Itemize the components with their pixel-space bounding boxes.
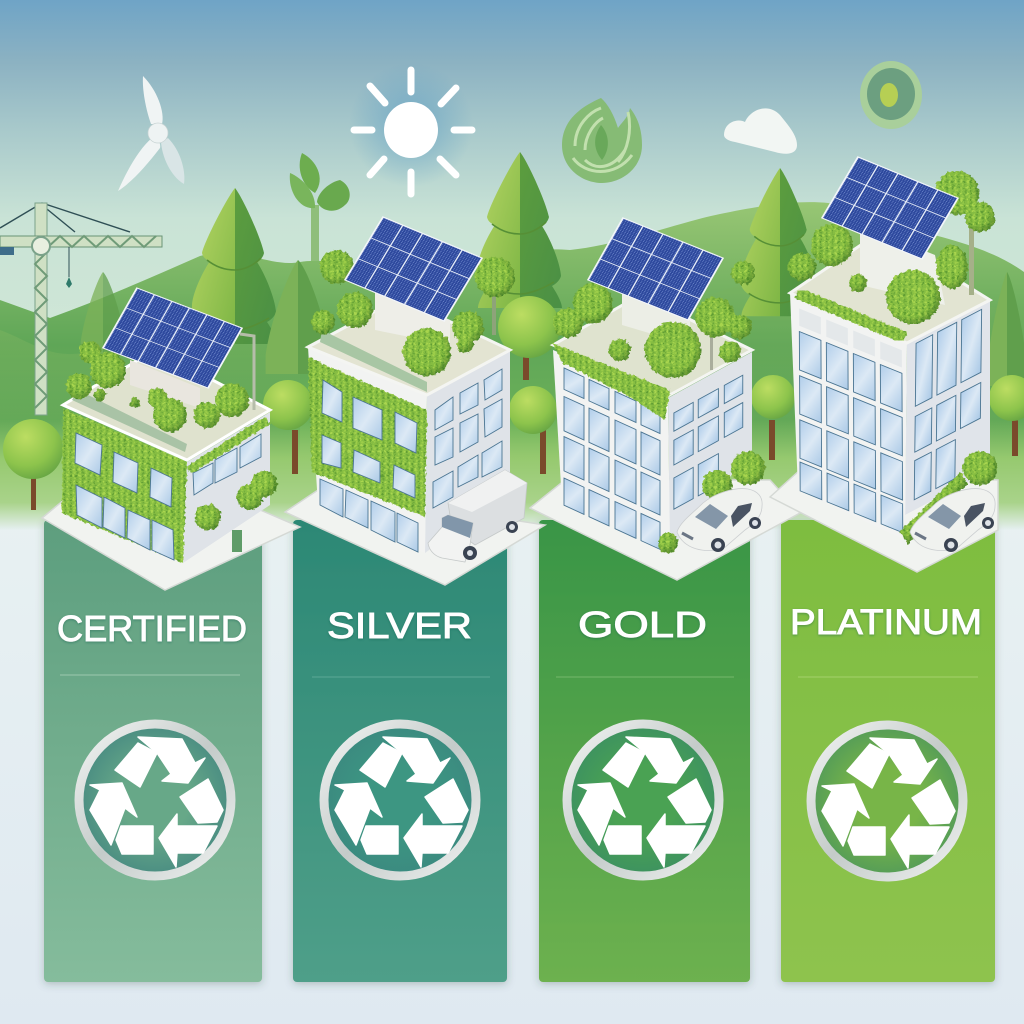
car bbox=[677, 489, 762, 552]
solar panel bbox=[822, 157, 958, 259]
sky background bbox=[0, 0, 1024, 520]
label: CERTIFIED bbox=[57, 608, 247, 649]
label: SILVER bbox=[327, 605, 472, 646]
roof planting bbox=[311, 250, 515, 376]
label: GOLD bbox=[578, 604, 707, 645]
icon: wind turbine bbox=[118, 76, 184, 191]
icon: recycling badge bbox=[811, 725, 963, 877]
windows: left wall bbox=[799, 308, 903, 533]
icon: crane bbox=[0, 203, 162, 415]
walls bbox=[308, 347, 510, 553]
windows: left wall bbox=[564, 368, 660, 549]
panel: Silver bbox=[293, 520, 507, 982]
background hills bbox=[0, 202, 1024, 530]
icon: sun bbox=[349, 63, 473, 194]
building: Certified bbox=[42, 288, 300, 590]
windows: right wall bbox=[914, 309, 982, 500]
icon: recycling badge bbox=[79, 724, 231, 876]
rooftop shed bbox=[622, 290, 690, 345]
ivy wall bbox=[62, 408, 187, 563]
glass railing bbox=[72, 390, 187, 452]
walls bbox=[183, 412, 270, 563]
solar panel bbox=[588, 218, 723, 320]
icon: recycling badge bbox=[567, 724, 719, 876]
glass railing bbox=[320, 330, 427, 392]
icon: recycling badge bbox=[324, 724, 476, 876]
lower page background bbox=[0, 505, 1024, 1024]
card background bbox=[539, 520, 750, 982]
icon: sprout bbox=[290, 153, 350, 275]
platform bbox=[530, 480, 800, 580]
label: PLATINUM bbox=[790, 603, 982, 642]
walls bbox=[790, 293, 990, 540]
rooftop shed bbox=[860, 225, 945, 305]
shrubs by the car bbox=[658, 451, 765, 553]
cone trees bbox=[81, 152, 1024, 386]
ivy on right wall bbox=[189, 420, 268, 470]
building: Silver bbox=[285, 217, 545, 585]
icon: leaf emblem bbox=[562, 98, 642, 183]
roof hedge bbox=[797, 293, 905, 338]
hedge by the car bbox=[900, 451, 997, 544]
building: Platinum bbox=[770, 157, 998, 572]
icon: ring emblem bbox=[860, 61, 922, 129]
panel: Certified bbox=[44, 520, 262, 982]
roof planting bbox=[553, 261, 755, 378]
windows bbox=[75, 433, 261, 560]
card background bbox=[781, 520, 995, 982]
roof planting bbox=[788, 171, 995, 324]
rooftop shed bbox=[375, 290, 450, 345]
panel: Platinum bbox=[781, 520, 995, 982]
panel support bbox=[240, 334, 254, 410]
card background bbox=[44, 520, 262, 982]
windows: right wall bbox=[674, 375, 743, 509]
tree trunk bbox=[492, 285, 496, 335]
icon: cloud bbox=[724, 108, 797, 154]
roof terrace bbox=[790, 232, 990, 343]
ivy bbox=[308, 357, 427, 517]
round trees bbox=[3, 296, 1024, 510]
tree trunk bbox=[969, 215, 974, 295]
platform bbox=[285, 490, 545, 585]
roof terrace bbox=[553, 295, 752, 396]
panel: Gold bbox=[539, 520, 750, 982]
windows bbox=[320, 369, 502, 552]
car bbox=[910, 489, 995, 552]
walls bbox=[553, 350, 752, 550]
tree trunk bbox=[710, 325, 713, 370]
building: Gold bbox=[530, 218, 800, 580]
roof planting bbox=[66, 341, 249, 432]
platform bbox=[42, 480, 300, 590]
roof terrace bbox=[308, 298, 510, 395]
solar panel bbox=[345, 217, 482, 321]
card background bbox=[293, 520, 507, 982]
front garden bbox=[195, 471, 277, 530]
solar panel bbox=[103, 288, 242, 388]
platform bbox=[770, 470, 998, 572]
delivery van bbox=[428, 470, 527, 562]
roof terrace bbox=[63, 350, 270, 460]
garden ornament bbox=[232, 530, 242, 552]
ivy drape bbox=[552, 343, 670, 420]
rooftop shed bbox=[130, 360, 200, 408]
